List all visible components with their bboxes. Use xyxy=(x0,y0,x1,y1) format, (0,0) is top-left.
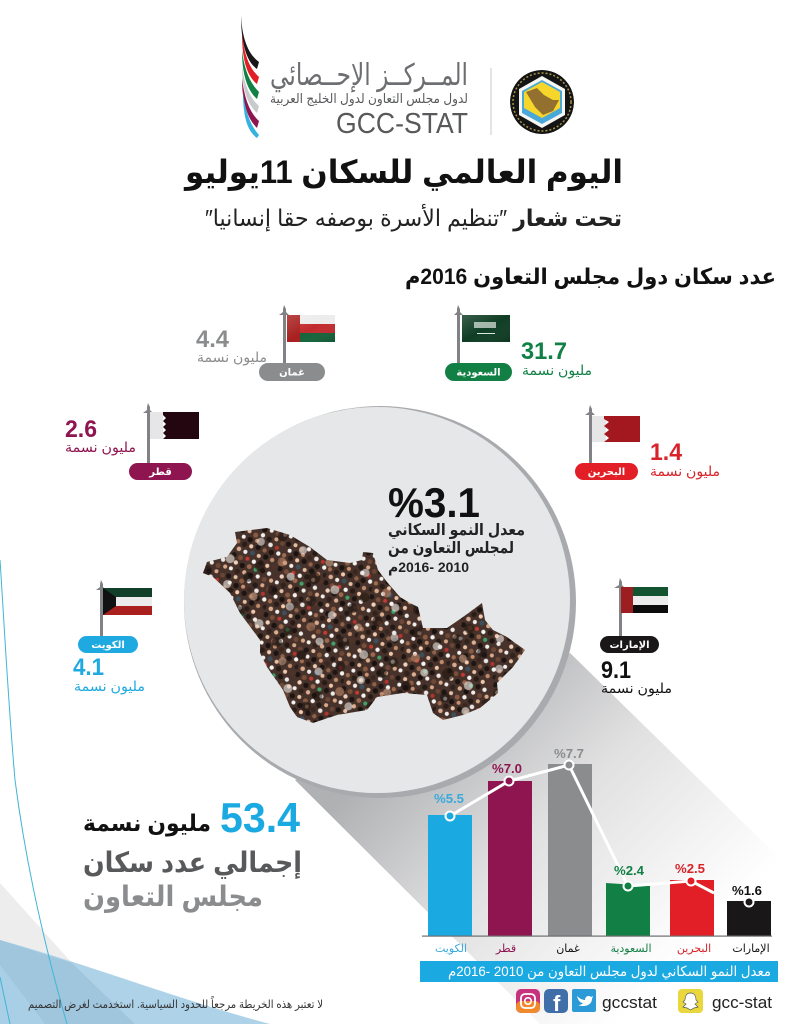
country: Bahrain xyxy=(575,405,720,480)
category labels: غمان xyxy=(556,943,580,955)
label: million: مليون نسمة xyxy=(83,810,211,837)
stat: Bahrain population: 1.4 xyxy=(650,439,683,466)
icon: flagpole xyxy=(143,403,153,464)
chart caption bar: معدل النمو السكاني لدول مجلس التعاون من 2010 -2016م xyxy=(448,963,771,980)
text: gccstat handle: gccstat xyxy=(602,993,657,1012)
pill: Saudi label xyxy=(445,363,512,381)
markers xyxy=(446,760,754,906)
country: Kuwait xyxy=(73,580,152,695)
logo: Arabic name: المــركــز الإحــصائي xyxy=(270,59,468,93)
country: Saudi Arabia xyxy=(445,305,592,381)
icon: facebook: f xyxy=(553,991,561,1016)
chart caption bar xyxy=(420,961,778,982)
pill: Bahrain label: البحرين xyxy=(588,467,625,478)
icon: flagpole xyxy=(279,305,289,364)
label: million: مليون نسمة xyxy=(74,678,145,695)
value labels: %2.5 xyxy=(675,861,705,876)
label: million: مليون نسمة xyxy=(522,362,592,379)
pill: UAE label: الإمارات xyxy=(609,640,650,651)
label: million: مليون نسمة xyxy=(601,680,672,697)
stat: Saudi population: 31.7 xyxy=(521,338,567,365)
social media xyxy=(516,989,772,1016)
text: total population line 1: إجمالي عدد سكان xyxy=(83,847,302,880)
icon: snapchat xyxy=(678,989,703,1013)
pill: Oman label: غمان xyxy=(279,368,305,378)
stat: Qatar population: 2.6 xyxy=(65,416,97,443)
logo: GCC-STAT wordmark: GCC-STAT xyxy=(336,108,468,140)
text: growth rate line 1: معدل النمو السكاني xyxy=(388,522,525,540)
logo: Arabic subtitle: لدول مجلس التعاون لدول الخليج العربية xyxy=(270,91,468,107)
value labels xyxy=(434,746,762,898)
panel: central circle xyxy=(184,406,576,798)
label: million: مليون نسمة xyxy=(650,463,720,480)
value labels: %2.4 xyxy=(614,863,645,878)
bar: UAE xyxy=(727,901,771,936)
bar chart: growth rate by country xyxy=(422,746,772,955)
icon: Saudi flag xyxy=(462,315,510,342)
category labels: الإمارات xyxy=(732,943,770,955)
bar: Saudi xyxy=(606,883,650,936)
value labels: %1.6 xyxy=(732,883,762,898)
map: GCC crowd silhouette xyxy=(203,528,525,723)
shadow cast by circle xyxy=(295,653,807,1024)
total population xyxy=(83,794,302,913)
trend line xyxy=(450,765,714,893)
icon: flagpole xyxy=(585,405,595,464)
logo: GCC-STAT xyxy=(241,15,574,140)
pill: Bahrain label xyxy=(575,463,638,480)
icon: instagram xyxy=(516,989,540,1013)
bar: Oman xyxy=(548,764,592,936)
background: bottom-left shapes xyxy=(0,560,270,1024)
icon: facebook xyxy=(544,989,568,1016)
stat: total: 53.4 xyxy=(220,794,301,841)
icon: flagpole xyxy=(454,305,463,364)
icon: twitter xyxy=(572,989,596,1012)
country: Qatar xyxy=(65,403,199,480)
label: million: مليون نسمة xyxy=(197,349,267,366)
icon: Oman flag xyxy=(287,315,335,342)
stat: growth rate: %3.1 xyxy=(388,479,480,526)
stat: Kuwait population: 4.1 xyxy=(73,654,104,681)
text: gcc-stat handle: gcc-stat xyxy=(712,993,772,1012)
text: growth rate line 2: لمجلس التعاون من xyxy=(388,540,514,557)
stat: Oman population: 4.4 xyxy=(196,326,230,353)
bar: Kuwait xyxy=(428,815,472,936)
category labels xyxy=(435,943,770,955)
text: total population line 2: مجلس التعاون xyxy=(83,881,263,913)
value labels: %7.0 xyxy=(492,761,522,776)
icon: Bahrain flag xyxy=(592,416,640,442)
pill: Saudi label: السعودية xyxy=(456,368,501,378)
icon: Qatar flag xyxy=(150,412,199,439)
stat: UAE population: 9.1 xyxy=(601,657,631,684)
text: growth rate line 3: 2010 -2016م xyxy=(388,559,469,575)
icon: flagpole xyxy=(96,580,106,637)
icon: GCC emblem xyxy=(510,70,574,134)
title: اليوم العالمي للسكان 11يوليو xyxy=(183,154,623,191)
icon: flagpole xyxy=(614,578,625,637)
icon: UAE flag xyxy=(621,587,668,613)
footnote: لا تعتبر هذه الخريطة مرجعاً للحدود السياسية. استخدمت لغرض التصميم xyxy=(28,995,323,1012)
pill: Qatar label: قطر xyxy=(148,467,172,478)
value labels: %5.5 xyxy=(434,791,464,806)
icon: Kuwait flag xyxy=(103,588,152,615)
category labels: الكويت xyxy=(435,943,467,955)
icon: logo ribbons xyxy=(241,15,259,138)
heading: GCC population: عدد سكان دول مجلس التعاون 2016م xyxy=(405,264,776,290)
subtitle: تحت شعار ″تنظيم الأسرة بوصفه حقا إنسانيا″ xyxy=(205,204,622,232)
country: UAE xyxy=(600,578,672,697)
category labels: السعودية xyxy=(610,943,652,955)
pill: Kuwait label: الكويت xyxy=(91,640,125,651)
category labels: البحرين xyxy=(677,943,711,955)
value labels: %7.7 xyxy=(554,746,584,761)
bar: Qatar xyxy=(488,781,532,936)
label: million: مليون نسمة xyxy=(65,439,136,456)
country: Oman xyxy=(196,305,335,381)
category labels: قطر xyxy=(495,943,516,955)
bar: Bahrain xyxy=(670,880,714,936)
